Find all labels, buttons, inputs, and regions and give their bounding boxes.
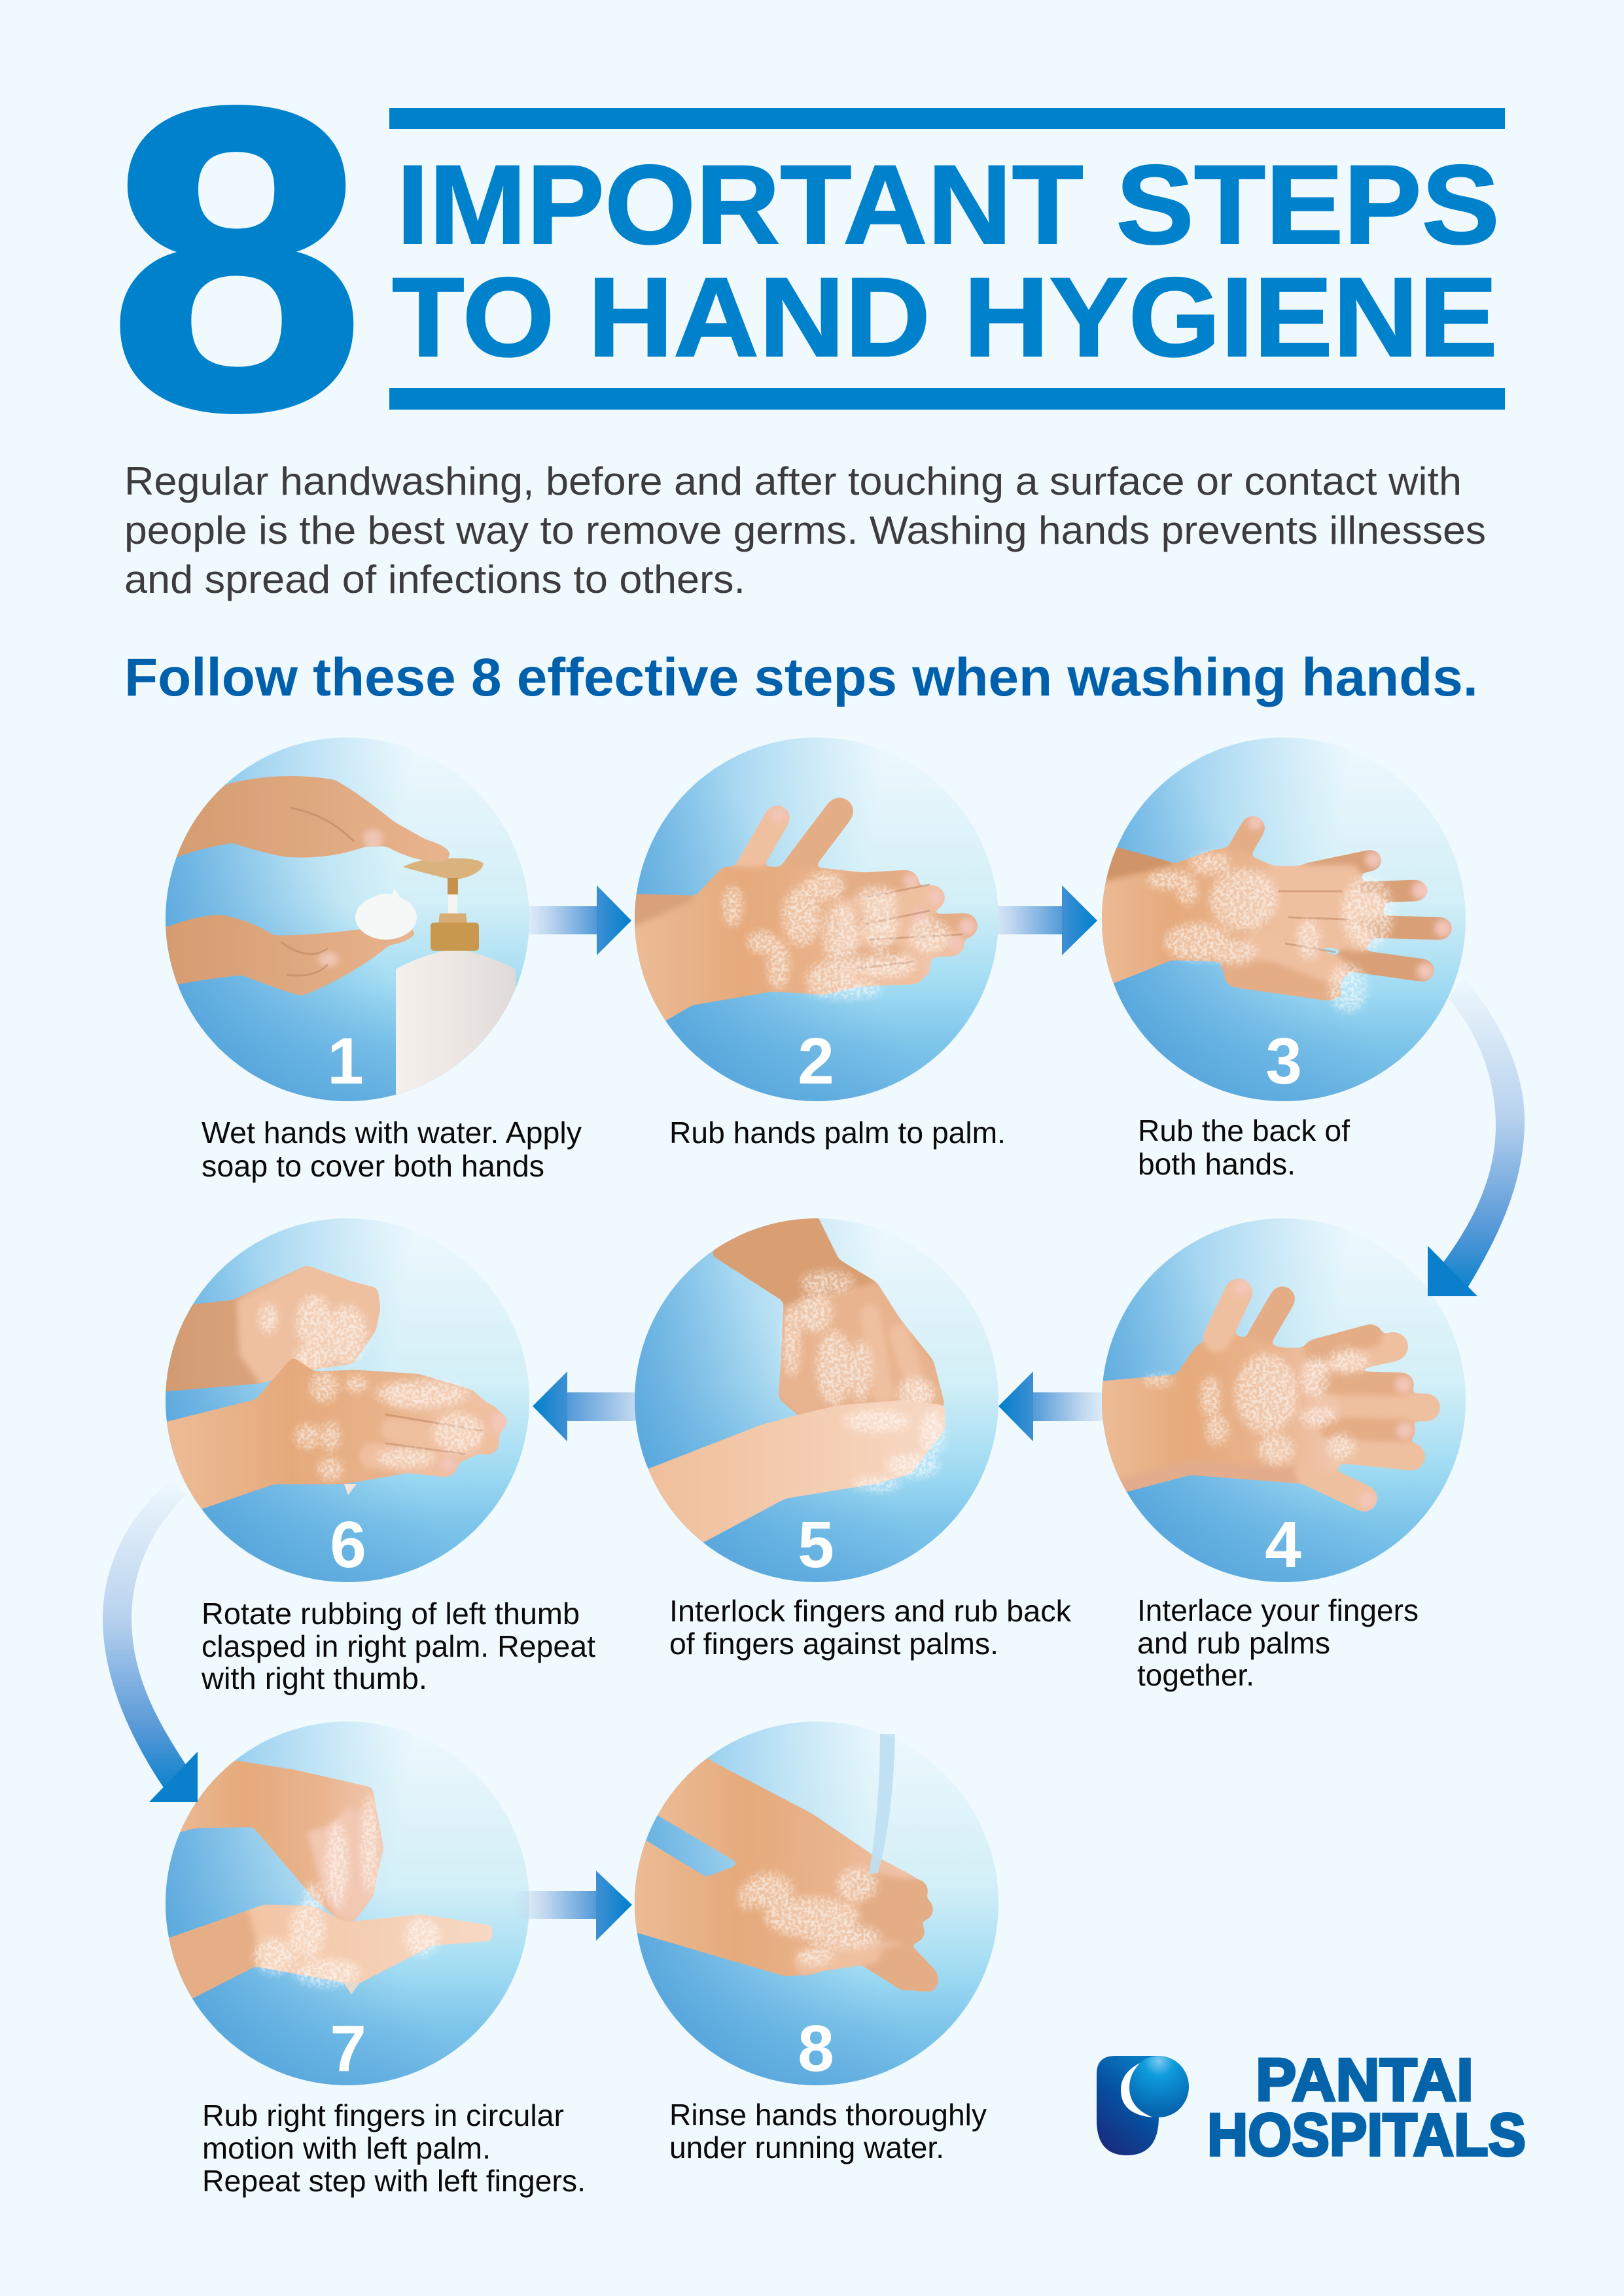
panel: step 3 [1089,737,1466,1181]
big number 8: 8 [109,19,364,498]
photo: palm to palm [622,808,975,1034]
step number: 6 [330,1508,366,1581]
intro paragraph: people is the best way to remove germs. Washing hands prevents illnesses [124,508,1486,552]
caption: with right thumb. [201,1661,427,1695]
circle background [1102,1218,1466,1582]
sub heading: Follow these 8 effective steps when washing hands. [124,648,1478,707]
caption [1138,1114,1350,1181]
step number: 1 [327,1025,364,1098]
title line 2: TO HAND HYGIENE [392,255,1498,380]
panel: step 7 [157,1722,586,2198]
photo: back of hands [1089,817,1451,1012]
caption: Rub right fingers in circular [202,2098,564,2132]
photo: back of fingers against palm [648,1218,948,1543]
water stream above circle edge [880,1734,895,1806]
panel: step 2 [622,737,1006,1150]
caption: Rub hands palm to palm. [669,1116,1006,1150]
arrow: curved step 3 to 4 [1428,976,1525,1296]
step number: 3 [1265,1025,1302,1098]
photo: rinsing under water [622,1734,924,1979]
logo text [1207,2047,1526,2168]
intro paragraph: and spread of infections to others. [124,557,745,601]
circle background [166,737,529,1101]
caption: Repeat step with left fingers. [202,2164,586,2198]
logo text: PANTAI [1256,2047,1474,2113]
panel: step 5 [635,1204,1072,1661]
photo: rotating thumb rub [157,1265,508,1525]
step number: 4 [1265,1508,1301,1581]
title bottom rule [389,388,1505,410]
panel: step 8 [622,1722,998,2164]
intro paragraph [124,459,1486,601]
caption: Rub the back of [1138,1114,1350,1148]
caption: together. [1137,1658,1254,1692]
arrow: step 4 to 5 [998,1371,1114,1441]
caption [201,1597,595,1695]
step number: 5 [798,1508,834,1581]
logo text: HOSPITALS [1207,2102,1526,2168]
caption: under running water. [669,2130,944,2164]
photo: hands and soap pump [147,776,516,1125]
caption: Interlock fingers and rub back [669,1594,1072,1628]
title line 1: IMPORTANT STEPS [397,142,1500,268]
caption [202,2098,586,2198]
soap foam [355,888,417,940]
logo mark [1097,2056,1189,2155]
caption: both hands. [1138,1147,1296,1181]
panel: step 6 [157,1218,595,1695]
circle background [635,1722,998,2085]
logo: Pantai Hospitals [1097,2047,1526,2168]
panel: step 4 [1093,1218,1466,1692]
intro paragraph: Regular handwashing, before and after touching a surface or contact with [124,459,1462,503]
caption: motion with left palm. [202,2131,491,2165]
photo: interlaced fingers [1093,1280,1426,1508]
caption: Rinse hands thoroughly [669,2098,987,2132]
caption: clasped in right palm. Repeat [202,1629,595,1663]
circle background [1102,737,1466,1101]
circle background [635,737,998,1101]
step number: 2 [798,1025,834,1098]
arrow: step 1 to 2 [518,885,631,955]
caption: of fingers against palms. [669,1627,998,1661]
circle background [635,1218,998,1582]
caption: Wet hands with water. Apply [202,1116,582,1150]
arrow: curved step 6 to 7 [103,1480,198,1802]
circle background [166,1722,529,2085]
panel: step 1 [147,737,582,1183]
caption: Interlace your fingers [1137,1593,1419,1627]
caption: Rotate rubbing of left thumb [202,1597,580,1631]
arrow: step 7 to 8 [514,1871,632,1941]
circle background [166,1218,529,1582]
arrow: step 5 to 6 [533,1371,674,1441]
arrow: step 2 to 3 [979,885,1097,955]
caption [669,2098,987,2164]
step number: 8 [798,2012,834,2085]
caption: and rub palms [1137,1626,1330,1660]
caption [669,1594,1072,1661]
step number: 7 [330,2012,366,2085]
caption [1137,1593,1419,1692]
caption [202,1116,582,1183]
title [109,19,1505,498]
soap pump [396,858,516,1095]
caption: soap to cover both hands [202,1149,544,1183]
photo: fingers rubbing palm [157,1761,492,2015]
title top rule [389,108,1505,129]
